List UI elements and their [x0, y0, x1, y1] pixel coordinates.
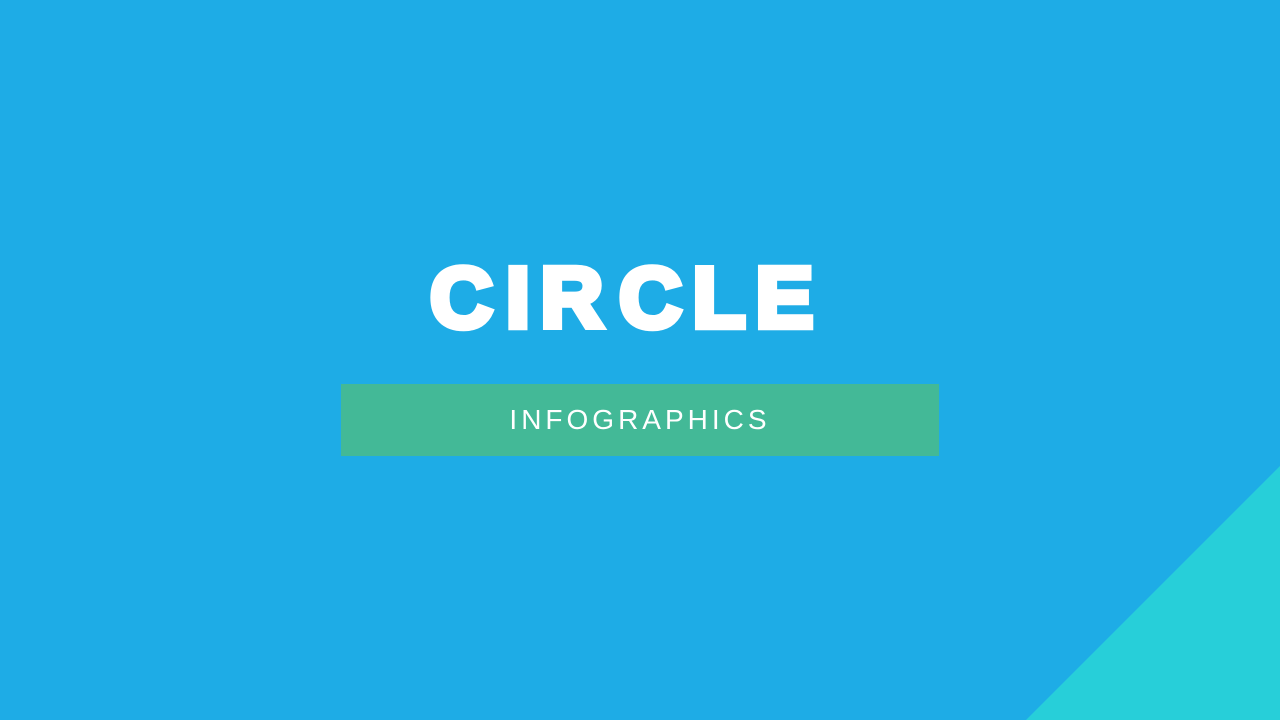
subtitle banner — [341, 384, 939, 456]
subtitle banner: INFOGRAPHICS — [509, 404, 771, 435]
